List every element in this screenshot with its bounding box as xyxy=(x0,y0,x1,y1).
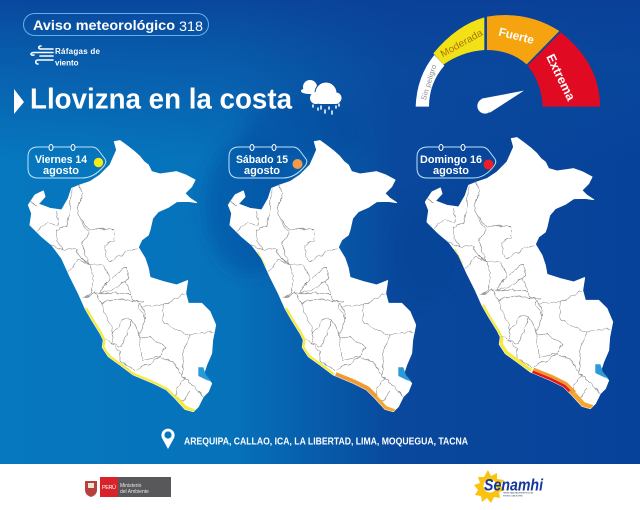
panel: map viernes 14 xyxy=(28,141,216,413)
tag: viernes 14 agosto xyxy=(28,144,106,178)
gauge segment: moderada: Moderada xyxy=(439,27,486,60)
icon: rain cloud xyxy=(301,80,342,114)
logo: ministerio del ambiente: PERÚ xyxy=(102,484,116,491)
gauge segment: extrema: Extrema xyxy=(543,52,578,104)
panel: map sabado 15 xyxy=(228,141,416,413)
logo: senamhi: Senamhi xyxy=(484,476,544,494)
tag: domingo 16 agosto: Domingo 16 xyxy=(420,154,482,166)
tag: viernes 14 agosto: Viernes 14 xyxy=(35,154,88,166)
tag: sabado 15 agosto: agosto xyxy=(244,165,280,177)
logo: senamhi xyxy=(474,470,544,503)
tag: sabado 15 agosto: Sábado 15 xyxy=(236,154,288,166)
logo: ministerio del ambiente xyxy=(85,477,171,497)
logo: senamhi: E HIDROLOGÍA DEL PERÚ xyxy=(503,494,523,498)
title: Llovizna en la costa xyxy=(30,84,293,116)
header pill: aviso meteorologico: Aviso meteorológico xyxy=(33,17,175,33)
gauge segment: sin peligro: Sin peligro xyxy=(419,64,438,101)
coast alert bands: yellow and orange xyxy=(257,252,395,413)
gauge segment: moderada xyxy=(433,17,486,65)
wind label: viento xyxy=(55,58,79,68)
icon: location pin xyxy=(161,429,175,449)
affected regions: AREQUIPA, CALLAO, ICA, LA LIBERTAD, LIMA, MOQUEGUA, TACNA xyxy=(184,436,468,448)
tag: viernes 14 agosto: agosto xyxy=(43,165,79,177)
logo: ministerio del ambiente: del Ambiente xyxy=(120,489,149,495)
gauge needle xyxy=(477,91,524,114)
tag: domingo 16 agosto xyxy=(417,144,496,178)
panel: map domingo 16 xyxy=(425,138,613,410)
logo: senamhi: SERVICIO NACIONAL DE METEOROLOGÍA xyxy=(503,492,534,494)
gauge segment: fuerte xyxy=(487,15,559,64)
coast alert band: yellow xyxy=(85,308,195,413)
gauge segment: fuerte: Fuerte xyxy=(497,25,536,47)
gauge: alert levels xyxy=(416,15,600,114)
footer xyxy=(0,464,640,510)
coast alert bands: yellow, orange and red xyxy=(454,249,592,410)
icon: wind xyxy=(31,46,53,64)
tag: domingo 16 agosto: agosto xyxy=(433,165,469,177)
gauge segment: sin peligro xyxy=(416,55,444,107)
tag: sabado 15 agosto xyxy=(229,144,307,178)
header pill: aviso meteorologico: 318 xyxy=(179,18,203,34)
gauge segment: extrema xyxy=(528,32,600,107)
wind label: Ráfagas de xyxy=(55,47,101,56)
logo: ministerio del ambiente: Ministerio xyxy=(120,483,142,489)
header pill: aviso meteorologico xyxy=(24,14,208,36)
